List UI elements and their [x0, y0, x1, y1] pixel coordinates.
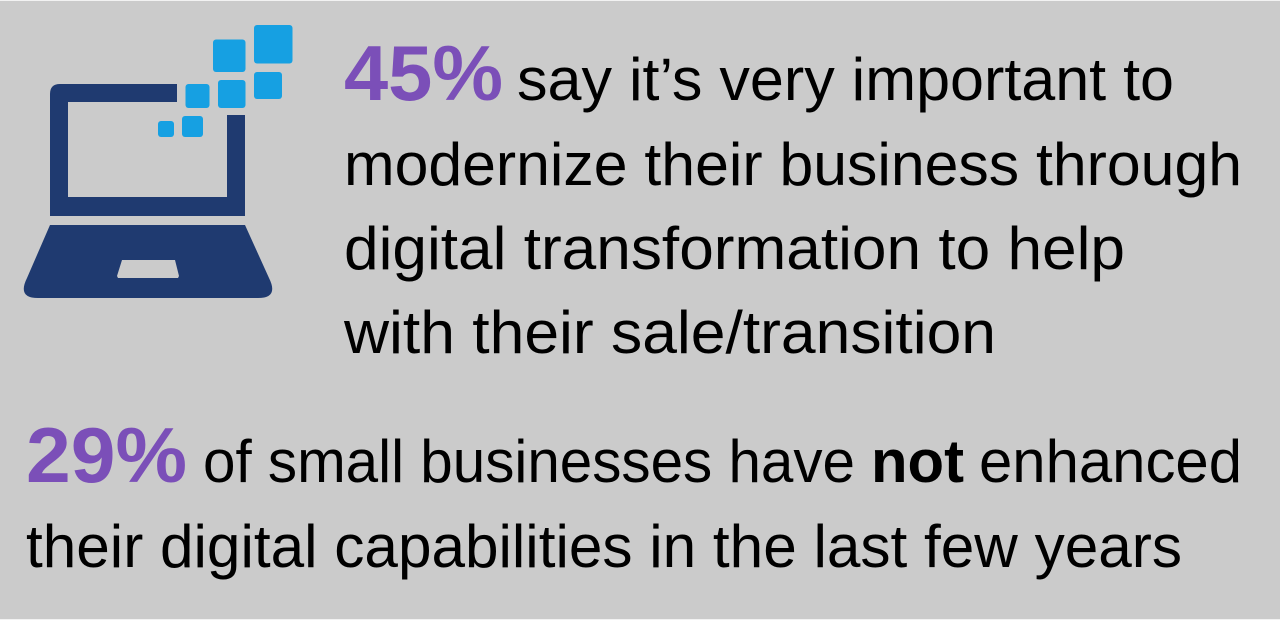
statistic: 29% text block [26, 411, 1242, 580]
line 2: modernize their business through [344, 131, 1242, 198]
statistic: 45% text block [343, 29, 1242, 366]
line 1 end: enhanced [979, 428, 1242, 495]
icon: laptop with digital squares [24, 25, 292, 298]
laptop base with trackpad [24, 225, 272, 298]
figure: 45%: 45% [344, 29, 503, 117]
figure: 29%: 29% [26, 411, 187, 499]
digital squares [158, 25, 292, 137]
line 1 start: of small businesses have [203, 428, 855, 495]
laptop screen frame [50, 84, 245, 216]
line 1: say it’s very important to [517, 46, 1174, 113]
line 4: with their sale/transition [343, 299, 996, 366]
line 3: digital transformation to help [344, 215, 1125, 282]
bold word: not: not [871, 428, 964, 495]
line 2: their digital capabilities in the last few years [26, 513, 1182, 580]
